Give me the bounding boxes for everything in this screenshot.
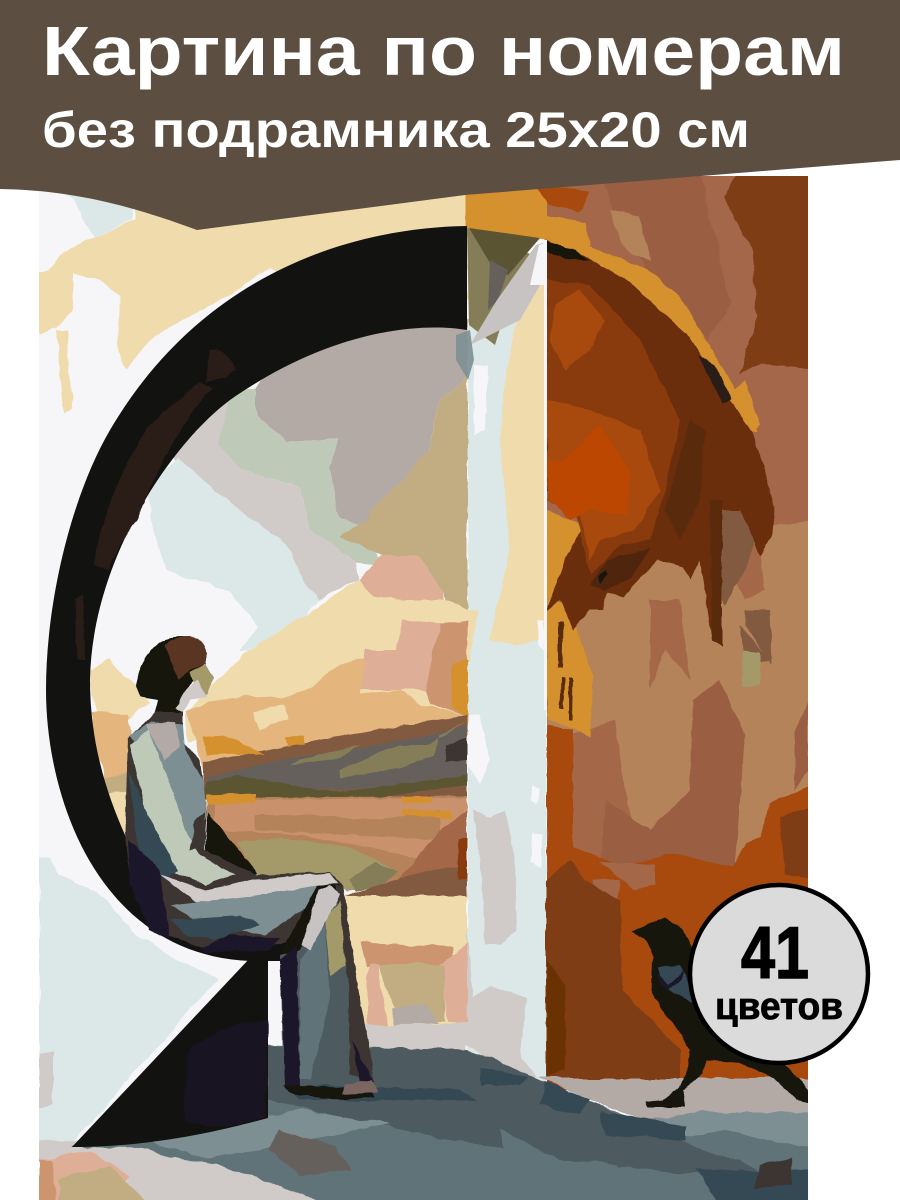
panel: left background and sky — [39, 180, 468, 1149]
ochre drip — [546, 510, 593, 737]
arch: black ring — [46, 226, 467, 961]
seat: black triangle — [72, 955, 268, 1147]
badge: 41 colors: 41 — [741, 913, 809, 994]
dress skirt and feet — [280, 884, 378, 1100]
badge: 41 colors: цветов — [715, 986, 843, 1028]
title: Картина по номерам — [42, 12, 845, 90]
icon: black bird — [632, 918, 810, 1107]
black cloth behind arm — [204, 812, 257, 875]
dome — [545, 240, 775, 647]
lower orange and rust — [547, 725, 815, 1090]
lower wall — [547, 520, 815, 880]
top wedge between ring and pillar — [456, 228, 547, 710]
ring shading — [75, 349, 236, 660]
painting — [39, 170, 815, 1200]
figure: seated woman — [125, 637, 378, 1100]
subtitle: без подрамника 25х20 см — [42, 102, 750, 158]
badge: 41 colors — [690, 885, 868, 1063]
panel: ground — [39, 1045, 815, 1200]
panel: hills and lake — [203, 715, 467, 896]
hair and head — [135, 637, 213, 712]
panel: right rust wall — [465, 170, 815, 1090]
dress torso and arm — [125, 712, 342, 952]
panel: central pillar — [467, 260, 546, 1085]
header banner — [0, 0, 900, 230]
